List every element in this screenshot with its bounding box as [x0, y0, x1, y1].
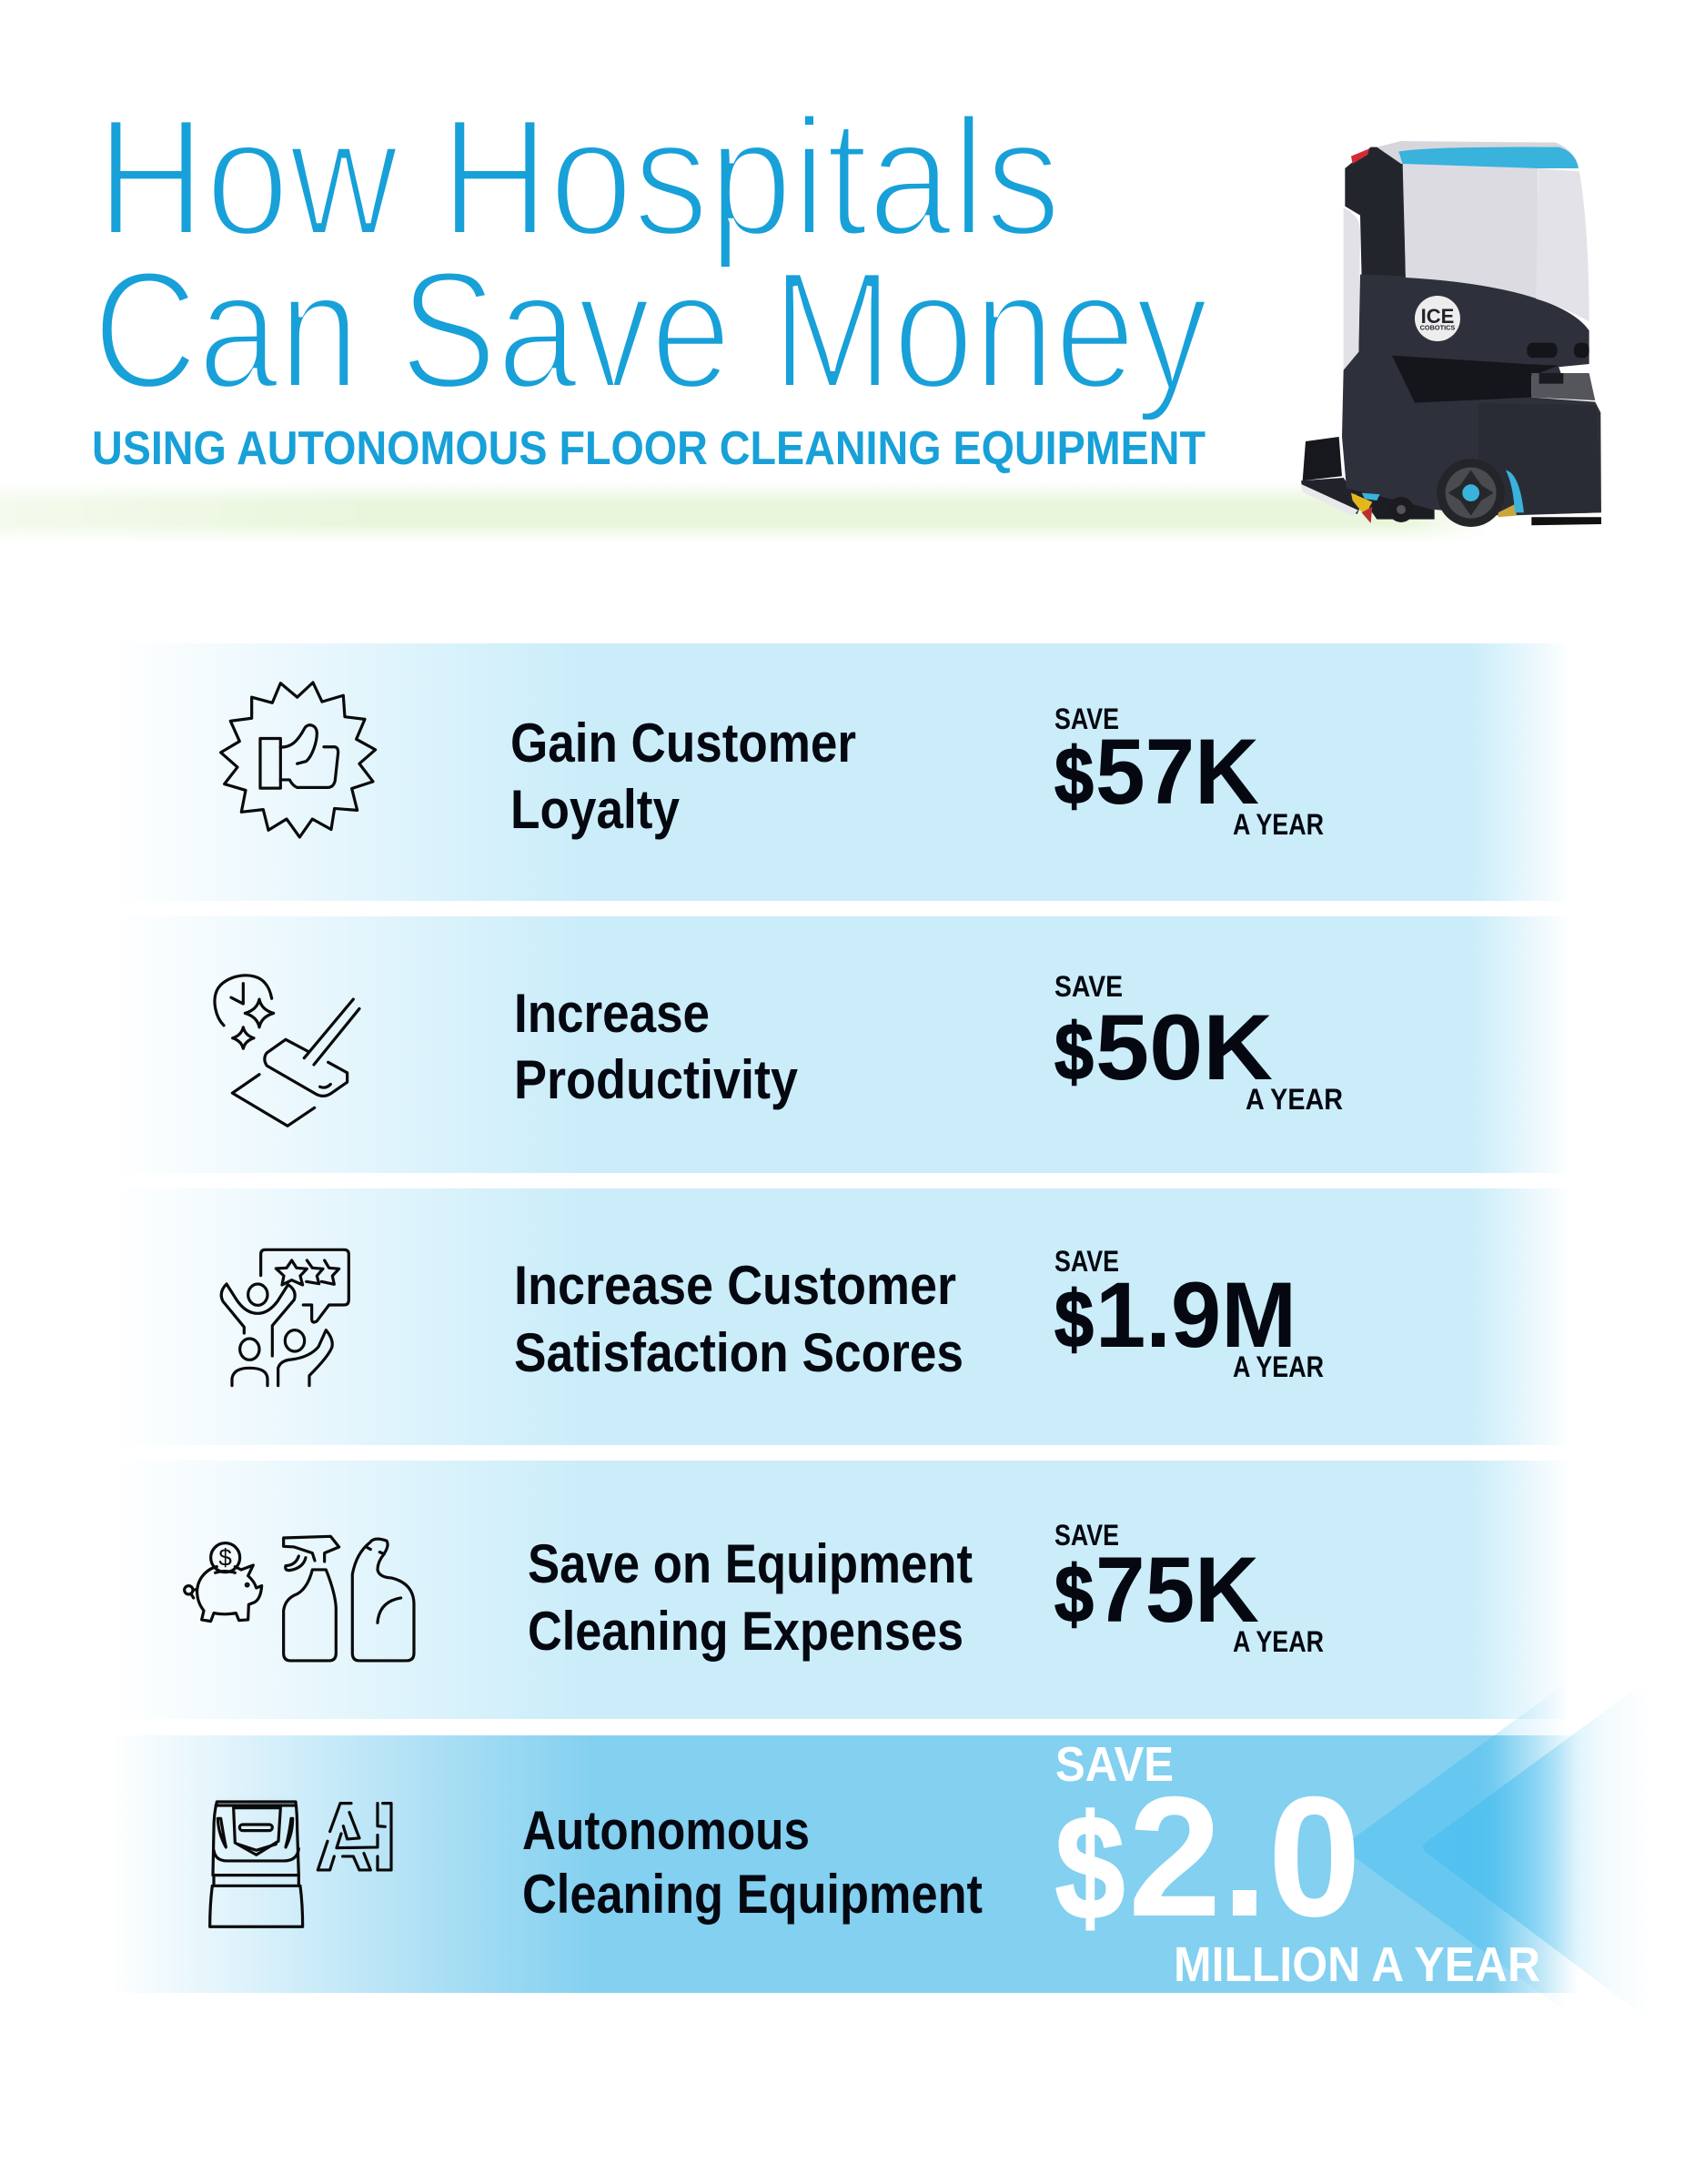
heading: gain customer loyalty: Gain Customer: [510, 713, 856, 774]
icon: piggy bank and cleaning bottles: [185, 1536, 414, 1661]
savings: 50K: [1054, 970, 1343, 1116]
savings: 57K: SAVE: [1054, 703, 1119, 735]
savings: 57K: [1054, 703, 1324, 841]
heading: increase customer satisfaction scores: [514, 1255, 964, 1383]
heading: increase productivity: Increase: [514, 983, 710, 1044]
savings: 1.9M: 1.9M: [1095, 1263, 1296, 1367]
savings: 50K: 50K: [1095, 996, 1273, 1099]
heading: autonomous cleaning equipment: Cleaning Equipment: [522, 1864, 983, 1925]
panel: save on equipment cleaning expenses: [111, 1461, 1573, 1719]
arrow: pale chevron pointing left: [1341, 1682, 1650, 2018]
heading: increase customer satisfaction scores: Increase Customer: [514, 1255, 956, 1316]
heading: save on equipment cleaning expenses: Cleaning Expenses: [528, 1601, 964, 1662]
panel: increase customer satisfaction scores: [111, 1188, 1573, 1445]
title: Can Save Money: [93, 236, 1208, 423]
heading: increase productivity: [514, 983, 799, 1110]
savings: 1.9M: SAVE: [1054, 1245, 1119, 1278]
heading: gain customer loyalty: Loyalty: [510, 779, 681, 840]
savings: 50K: SAVE: [1054, 970, 1123, 1003]
icon: mop with clock and sparkles: [215, 976, 359, 1126]
title: How Hospitals: [96, 83, 1061, 270]
image: autonomous floor cleaning robot: COBOTICS: [1420, 324, 1455, 332]
savings: 1.9M: $: [1054, 1274, 1094, 1364]
savings: 75K: $: [1054, 1549, 1094, 1639]
savings: 50K: A YEAR: [1246, 1083, 1343, 1116]
title: [93, 83, 1208, 423]
icon: cheering people with star rating: [221, 1249, 348, 1386]
green floor band: [0, 482, 1492, 542]
savings: 50K: $: [1054, 1006, 1094, 1097]
savings: 2.0 million a year: MILLION A YEAR: [1174, 1937, 1540, 1992]
icon: piggy bank and cleaning bottles: $: [218, 1544, 232, 1572]
heading: save on equipment cleaning expenses: Save on Equipment: [528, 1533, 973, 1594]
savings: 75K: SAVE: [1054, 1519, 1119, 1552]
savings: 1.9M: A YEAR: [1233, 1350, 1324, 1383]
image: autonomous floor cleaning robot: ICE: [1421, 305, 1454, 328]
savings: 2.0 million a year: [1055, 1737, 1540, 1992]
heading: autonomous cleaning equipment: Autonomous: [522, 1800, 810, 1861]
heading: increase productivity: Productivity: [514, 1049, 799, 1110]
savings: 57K: 57K: [1095, 720, 1259, 824]
panel: increase productivity: [111, 916, 1573, 1173]
savings: 57K: $: [1054, 731, 1094, 821]
savings: 2.0 million a year: SAVE: [1055, 1737, 1174, 1792]
savings: 2.0 million a year: $: [1055, 1785, 1125, 1950]
savings: 75K: 75K: [1095, 1538, 1259, 1642]
savings: 1.9M: [1054, 1245, 1324, 1383]
savings: 75K: [1054, 1519, 1324, 1658]
heading: save on equipment cleaning expenses: [528, 1533, 973, 1662]
savings: 2.0 million a year: 2.0: [1128, 1761, 1361, 1952]
heading: gain customer loyalty: [510, 713, 856, 840]
heading: increase customer satisfaction scores: Satisfaction Scores: [514, 1322, 964, 1383]
savings: 75K: A YEAR: [1233, 1625, 1324, 1658]
image: autonomous floor cleaning robot: [1300, 141, 1601, 527]
icon: robot scrubber and AI letters: [210, 1802, 391, 1926]
heading: autonomous cleaning equipment: [522, 1800, 983, 1925]
subtitle: USING AUTONOMOUS FLOOR CLEANING EQUIPMENT: [92, 422, 1206, 475]
panel: autonomous cleaning equipment total: [111, 1682, 1650, 2018]
savings: 57K: A YEAR: [1233, 808, 1324, 841]
icon: thumbs up badge: [221, 682, 376, 837]
panel: gain customer loyalty: [111, 643, 1573, 901]
